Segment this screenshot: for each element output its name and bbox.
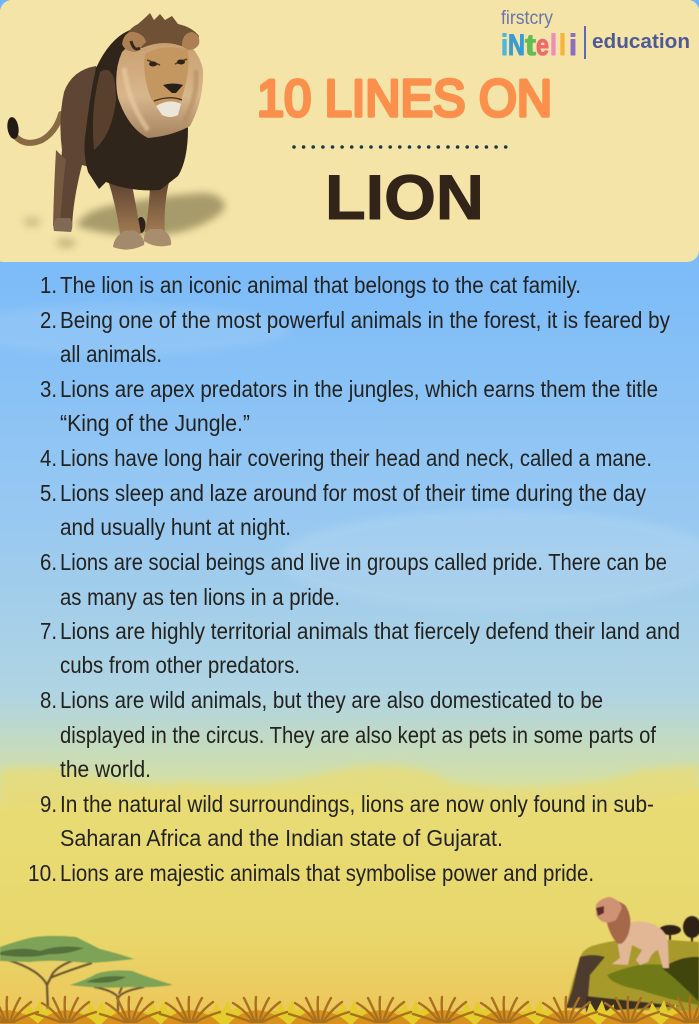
line 7 — [40, 618, 680, 678]
logo: firstcry intelli education: i — [569, 29, 577, 62]
line 7: cubs from other predators. — [60, 652, 300, 678]
logo: firstcry intelli education: N — [508, 29, 525, 62]
line 3: 3. — [40, 376, 57, 402]
distant trees — [659, 916, 699, 944]
line 5: Lions sleep and laze around for most of their time during the day — [60, 480, 646, 506]
line 10: Lions are majestic animals that symbolise power and pride. — [60, 860, 594, 886]
line 1: 1. — [40, 272, 57, 298]
line 9: 9. — [40, 791, 57, 817]
logo: firstcry intelli education: i — [501, 29, 508, 62]
logo: firstcry intelli education: e — [536, 29, 549, 62]
light mane — [116, 34, 203, 138]
line 2: 2. — [40, 307, 57, 333]
line 2: all animals. — [60, 341, 162, 367]
logo: firstcry intelli education: l — [559, 29, 566, 62]
line 8: the world. — [60, 756, 151, 782]
illustration: acacia trees — [0, 936, 173, 1012]
line 8: 8. — [40, 687, 57, 713]
title: 10 lines on: 10 LINES ON — [257, 70, 552, 128]
grass strip — [0, 997, 699, 1024]
line 7: 7. — [40, 618, 57, 644]
line 8 — [40, 687, 657, 782]
line 3 — [40, 376, 658, 436]
line 9: In the natural wild surroundings, lions are now only found in sub- — [60, 791, 654, 817]
line 10: 10. — [28, 860, 57, 886]
logo: firstcry intelli education — [501, 8, 690, 62]
line 6: as many as ten lions in a pride. — [60, 584, 340, 610]
roaring lion — [596, 897, 669, 968]
line 5 — [40, 480, 646, 540]
header panel — [0, 0, 699, 262]
illustration: rock with roaring lion — [566, 897, 699, 1012]
tail — [16, 114, 61, 143]
line 4: 4. — [40, 445, 57, 471]
line 6: 6. — [40, 549, 57, 575]
logo: firstcry intelli education: education — [592, 31, 690, 53]
logo: firstcry intelli education: t — [525, 29, 536, 62]
head top with ears — [124, 13, 199, 48]
logo: firstcry intelli education: firstcry — [501, 8, 553, 29]
rock — [566, 940, 699, 1012]
far paw — [136, 217, 146, 233]
face — [144, 47, 188, 113]
line 2 — [40, 307, 670, 367]
line 1: The lion is an iconic animal that belongs to the cat family. — [60, 272, 581, 298]
title: lion: LION — [325, 163, 484, 233]
line 5: 5. — [40, 480, 57, 506]
body and rear leg — [53, 66, 118, 228]
line 9: Saharan Africa and the Indian state of Gujarat. — [60, 825, 503, 851]
logo: firstcry intelli education: l — [550, 29, 557, 62]
line 8: Lions are wild animals, but they are also domesticated to be — [60, 687, 603, 713]
illustration: standing lion — [6, 13, 225, 250]
dark chest mane — [84, 30, 188, 190]
list of ten lines — [28, 272, 680, 886]
small tree — [70, 970, 173, 1012]
line 6 — [40, 549, 667, 610]
line 3: “King of the Jungle.” — [60, 410, 250, 436]
large tree — [0, 936, 134, 1012]
dotted divider — [292, 145, 508, 149]
lion shadow — [23, 193, 225, 248]
line 5: and usually hunt at night. — [60, 514, 291, 540]
line 9 — [40, 791, 654, 851]
front legs — [108, 180, 141, 234]
